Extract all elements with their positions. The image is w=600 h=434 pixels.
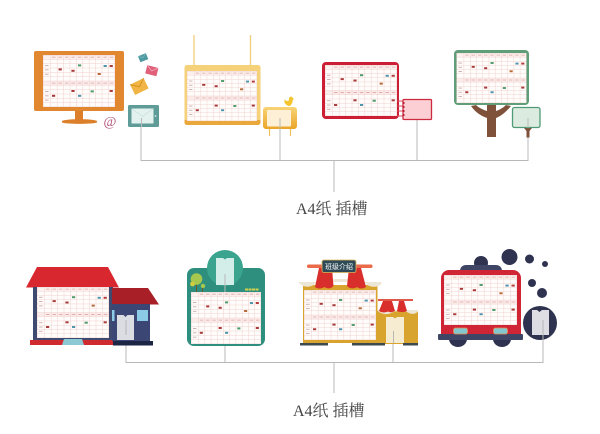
sign board: 班级介绍: [325, 262, 353, 271]
chassis: [438, 334, 523, 340]
item: desktop monitor with timetable: [34, 51, 124, 124]
tablet legs: [270, 129, 290, 136]
board bottom edge: [184, 120, 260, 125]
item: shop with timetable: [298, 260, 382, 343]
bus body: [441, 270, 521, 335]
tablet body: [403, 100, 432, 120]
item: green panel with timetable: [187, 250, 265, 346]
icon: envelopes: [130, 53, 158, 95]
annex roof: [112, 288, 159, 304]
main roof: [26, 267, 119, 288]
tablet: green on small tree: [512, 108, 540, 138]
circle top: [207, 250, 243, 286]
label: top slot: A4纸 插槽: [296, 199, 368, 218]
binding dots: [402, 102, 404, 116]
tablet: pink with rings: [397, 100, 432, 120]
item: tree with green board: [454, 50, 529, 137]
red awning right: [347, 268, 366, 288]
small wall: [377, 310, 418, 344]
icon: bird: [284, 97, 294, 106]
tree trunk and branches: [471, 105, 511, 137]
tablet: teal: [128, 105, 159, 127]
timetable: [304, 290, 376, 340]
door slot: [386, 317, 404, 343]
board frame: [454, 50, 529, 105]
connector: bottom bracket: [126, 275, 543, 393]
steps: [62, 339, 84, 345]
roof dome: [474, 256, 488, 270]
teal envelope: [138, 53, 148, 62]
small trunk: [524, 128, 532, 138]
small awning left: [379, 301, 395, 312]
annex window: [137, 310, 148, 321]
side window: [112, 310, 114, 321]
label: bottom slot: A4纸 插槽: [293, 401, 365, 420]
wall: [303, 285, 378, 343]
hanging strings: [194, 35, 250, 66]
timetable: [444, 275, 517, 325]
item: red notebook board with timetable: [322, 62, 399, 119]
timetable: [456, 53, 526, 103]
pink envelope: [145, 65, 158, 76]
small shop: [377, 299, 418, 344]
shop base: [300, 343, 418, 346]
roof bar: [460, 265, 502, 271]
annex wall: [112, 304, 150, 341]
wheels: [449, 339, 511, 347]
timetable: [43, 55, 115, 107]
icon: at sign: @: [104, 115, 117, 130]
annex building: [112, 288, 159, 346]
monitor stand: [62, 111, 97, 124]
tablet: yellow with bird: [263, 97, 297, 136]
tree icon: [190, 273, 205, 292]
item: hanging board with timetable: [184, 35, 260, 125]
tablet screen: [267, 110, 291, 126]
item: house with timetable: [26, 267, 119, 345]
item: bus with timetable: [438, 256, 523, 347]
timetable: [37, 287, 109, 338]
timetable: [187, 71, 257, 121]
wall frame: [33, 287, 113, 341]
small roof bar: [378, 299, 413, 301]
frame: [322, 62, 399, 119]
panel body: [187, 268, 265, 346]
tablet body: [263, 107, 297, 129]
timetable: [191, 292, 261, 344]
circular slot: [523, 306, 557, 340]
smoke circles: [502, 249, 548, 298]
small awning right: [397, 301, 407, 312]
timetable: [325, 65, 397, 116]
door slot: [117, 315, 134, 340]
connector: top bracket: [141, 118, 528, 192]
yellow dots: [245, 288, 258, 290]
yellow envelope: [130, 78, 149, 95]
slot insert: [216, 258, 234, 285]
base: [30, 340, 114, 345]
tablet body: [512, 108, 540, 128]
rings: [397, 101, 405, 116]
small canopy: [377, 310, 418, 314]
annex base: [113, 341, 153, 346]
roof bar: [307, 264, 372, 268]
monitor screen frame: [34, 51, 124, 111]
bus lights: [454, 328, 468, 334]
board frame: [184, 65, 260, 125]
red awning left: [315, 268, 334, 288]
scalloped canopy: [298, 279, 382, 287]
